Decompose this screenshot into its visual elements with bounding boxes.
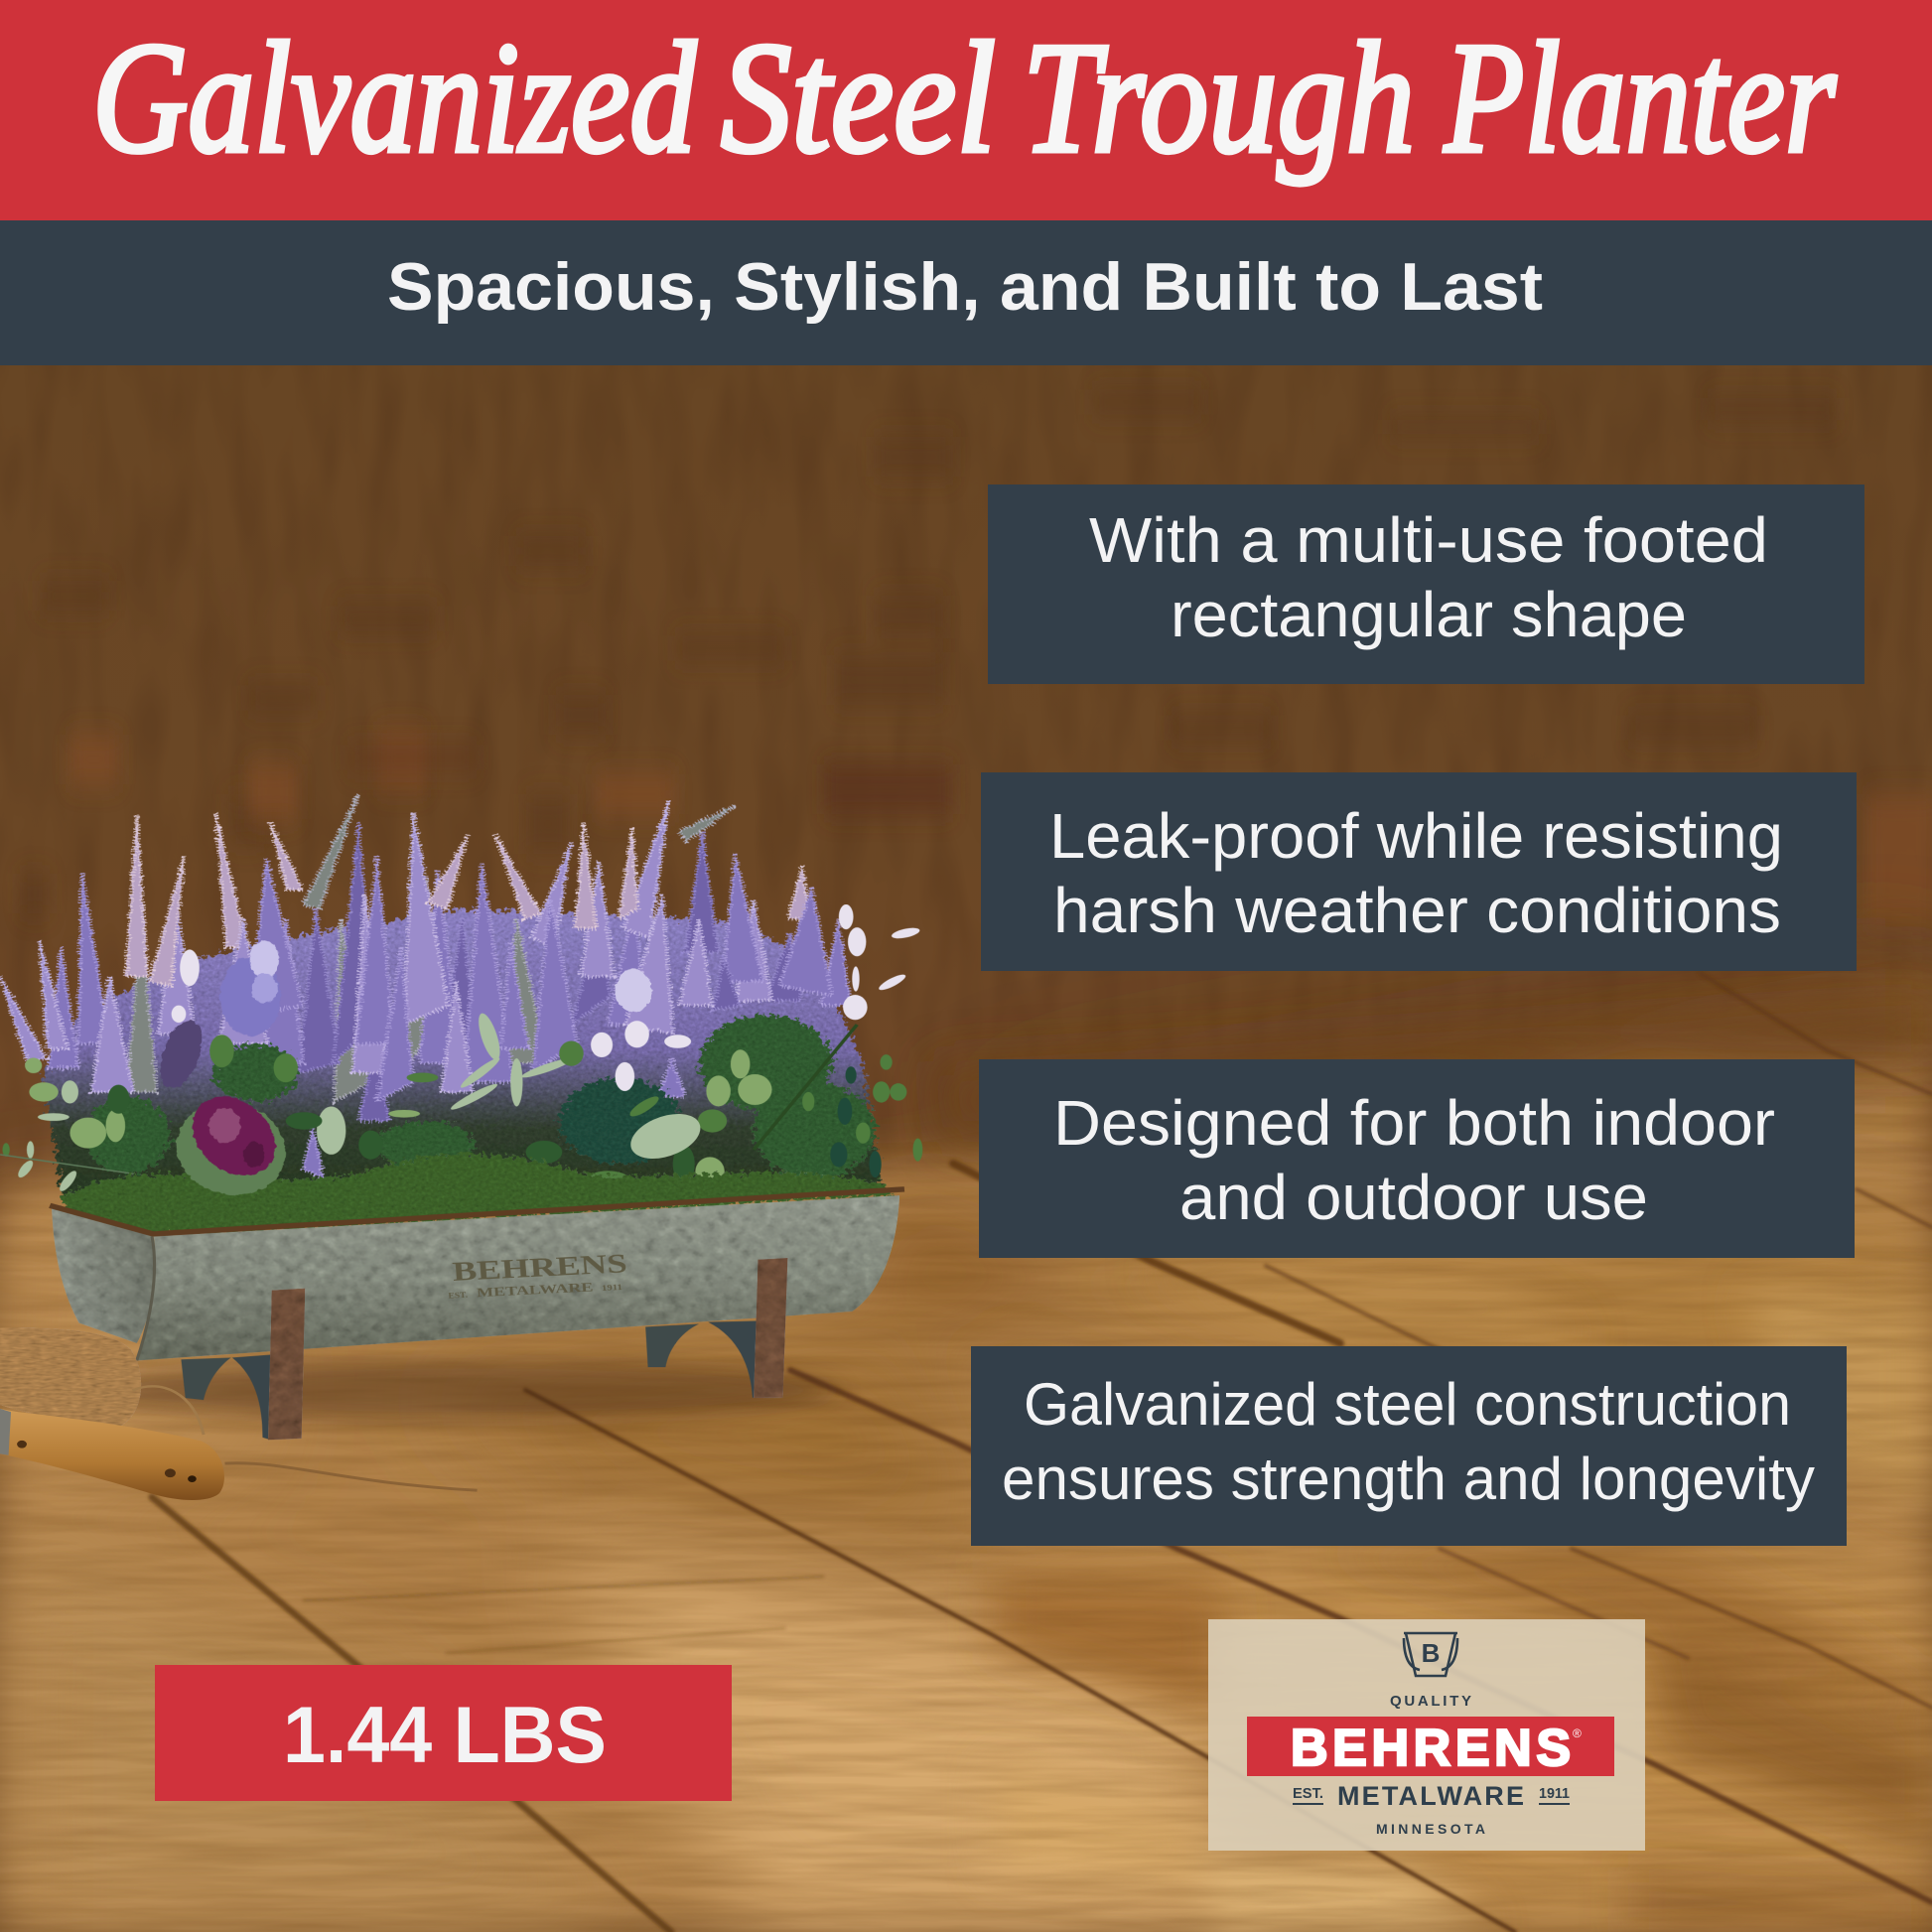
feature box: leak-proof: harsh weather conditions (1053, 875, 1781, 946)
feature box: indoor and outdoor (979, 1059, 1855, 1258)
subtitle text: Spacious, Stylish, and Built to Last (387, 249, 1543, 325)
blurred brick wall (28, 383, 1932, 931)
weight badge (155, 1665, 732, 1801)
front and rear leg plates (268, 1258, 787, 1440)
feature box: indoor and outdoor: and outdoor use (1179, 1162, 1648, 1233)
feature box: steel construction: Galvanized steel construction (1024, 1371, 1791, 1438)
feature box: indoor and outdoor: Designed for both indoor (1053, 1087, 1775, 1159)
rolled brown rim (50, 1189, 904, 1234)
feature box: steel construction: ensures strength and longevity (1002, 1446, 1815, 1512)
embossed Behrens mark: 1911 (602, 1283, 622, 1294)
icon: bucket (1404, 1633, 1457, 1676)
title text: Steel (721, 9, 996, 186)
foliage backing mass (43, 909, 882, 1222)
Behrens Metalware logo: QUALITY (1390, 1693, 1471, 1710)
white flower sprays (172, 904, 921, 1091)
planter with lavender arrangement (0, 793, 922, 1500)
garden tool handle (0, 1409, 224, 1500)
feature box: leak-proof (981, 772, 1857, 971)
embossed Behrens mark (445, 1248, 629, 1302)
green leaves (0, 1012, 922, 1238)
feature box: footed shape: rectangular shape (1171, 579, 1687, 650)
lavender spikes (0, 793, 851, 1178)
Behrens Metalware logo: 1911 (1539, 1785, 1570, 1802)
purple ornamental cabbage (157, 1086, 305, 1209)
Behrens Metalware logo: MINNESOTA (1376, 1821, 1485, 1837)
Behrens Metalware logo: METALWARE (1337, 1781, 1524, 1811)
title text (92, 9, 1837, 186)
embossed Behrens mark: EST. (448, 1291, 469, 1301)
title banner (0, 0, 1932, 220)
trough end face (52, 1206, 156, 1343)
feature box: footed shape (988, 484, 1864, 684)
subtitle banner (0, 220, 1932, 365)
wooden table surface (0, 953, 1932, 1932)
feature box: steel construction (971, 1346, 1847, 1546)
embossed Behrens mark: METALWARE (477, 1281, 594, 1301)
moss bed (61, 1154, 894, 1237)
Behrens Metalware logo (1208, 1619, 1645, 1851)
plank seams (152, 973, 1932, 1932)
galvanized trough (50, 1189, 904, 1440)
trough front face (137, 1195, 899, 1360)
feature box: footed shape: With a multi-use footed (1089, 504, 1768, 576)
red brand bar: BEHRENS (1291, 1720, 1571, 1777)
twine spool (0, 1327, 478, 1490)
title text: Trough (1023, 9, 1415, 186)
Behrens Metalware logo: EST. (1293, 1785, 1323, 1802)
rear feet arches (181, 1321, 757, 1440)
icon: bucket: B (1422, 1638, 1440, 1668)
weight badge: 1.44 LBS (283, 1691, 607, 1780)
ground shadow under trough (85, 1361, 839, 1419)
embossed Behrens mark: BEHRENS (451, 1248, 628, 1287)
title text: Planter (1444, 9, 1837, 186)
feature box: leak-proof: Leak-proof while resisting (1049, 800, 1783, 872)
hydrangea bloom and dark pod (153, 940, 651, 1091)
title text: Galvanized (92, 9, 697, 186)
red brand bar: ® (1573, 1726, 1582, 1740)
